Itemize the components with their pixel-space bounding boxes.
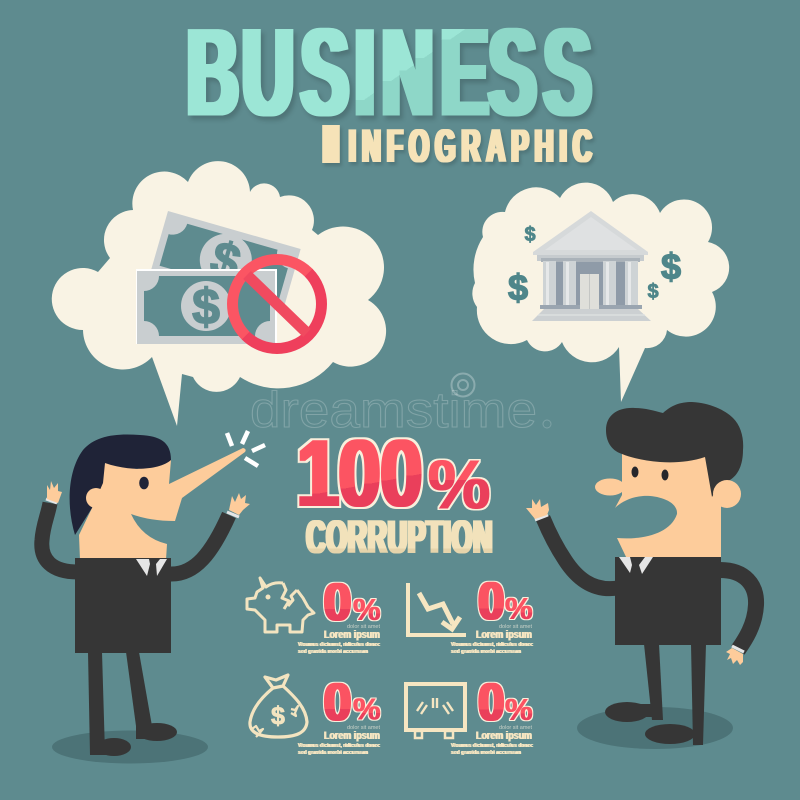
stat item: money bag: $ xyxy=(271,702,285,730)
ear xyxy=(713,480,741,508)
icon: bank building xyxy=(532,211,651,321)
hands xyxy=(47,481,62,503)
stat item: money bag: Lorem ipsum xyxy=(324,730,380,742)
icons: dollar signs around bank: $ xyxy=(508,267,528,308)
stat item: piggy bank xyxy=(247,571,381,655)
icons: dollar signs around bank xyxy=(508,224,681,308)
caption: dolor sit amet xyxy=(347,725,380,731)
stat item: falling chart xyxy=(408,571,533,655)
cuffs xyxy=(535,515,548,520)
watermark: dreamstime xyxy=(250,382,537,438)
shirt collar xyxy=(619,557,632,573)
stat item: safe: Vivamus dictumst, ridiculus donec xyxy=(451,743,533,749)
stat item: money bag xyxy=(250,671,381,756)
caption: dolor sit amet xyxy=(347,624,380,630)
shirt collar xyxy=(136,559,150,576)
stat item: money bag: Vivamus dictumst, ridiculus donec xyxy=(298,743,380,749)
stat item: money bag: sed gravida morbi accumsan xyxy=(298,750,369,756)
nose xyxy=(595,478,625,496)
icon: banknote front: $ xyxy=(192,279,220,335)
icon: banknote front xyxy=(136,269,277,344)
icon: safe xyxy=(406,684,465,738)
eyes xyxy=(632,466,638,478)
stat item: falling chart: % xyxy=(505,591,533,626)
icons: dollar signs around bank: $ xyxy=(524,224,536,246)
icon: broken piggy bank xyxy=(247,578,314,632)
stat item: falling chart: Vivamus dictumst, ridiculus donec xyxy=(451,642,533,648)
icon: banknote behind xyxy=(151,211,301,309)
stat item: safe: Lorem ipsum xyxy=(476,730,532,742)
hands xyxy=(526,499,549,519)
stat item: piggy bank: % xyxy=(353,592,381,627)
ear xyxy=(86,488,106,508)
ground shadow xyxy=(52,730,208,764)
arms xyxy=(543,518,618,589)
arms xyxy=(42,503,78,572)
speech cloud: right xyxy=(472,183,729,402)
headline: 100% xyxy=(297,420,490,527)
headline: 100%: % xyxy=(428,446,490,524)
stat item: money bag: % xyxy=(353,692,381,726)
icons: dollar signs around bank: $ xyxy=(647,281,659,303)
value: 0 xyxy=(324,571,351,632)
stat item: safe: % xyxy=(505,692,533,727)
hair xyxy=(70,434,171,535)
caption: dolor sit amet xyxy=(499,624,532,630)
headline: CORRUPTION: CORRUPTION xyxy=(306,512,493,564)
stat item: falling chart: sed gravida morbi accumsan xyxy=(451,649,522,655)
headline: 100%: 100 xyxy=(297,420,422,527)
subtitle: INFOGRAPHIC: INFOGRAPHIC xyxy=(349,121,598,173)
stat item: piggy bank: sed gravida morbi accumsan xyxy=(298,649,369,655)
icons: dollar signs around bank: $ xyxy=(661,246,681,287)
stat item: falling chart: Lorem ipsum xyxy=(476,629,532,641)
icon: banknote behind: $ xyxy=(204,230,247,292)
title: BUSINESS: BUSINESS xyxy=(187,2,591,143)
ground shadow xyxy=(577,707,733,749)
icon: falling chart xyxy=(408,583,466,635)
face with open mouth xyxy=(615,445,721,559)
character: right man xyxy=(526,402,756,749)
speech cloud: left xyxy=(52,161,386,426)
stat item: piggy bank: Lorem ipsum xyxy=(324,629,380,641)
eye xyxy=(139,477,149,489)
suit body xyxy=(75,558,171,653)
value: 0 xyxy=(479,571,504,631)
suit body xyxy=(615,557,721,645)
cuffs xyxy=(46,499,57,503)
icon: torn money bag xyxy=(250,675,307,737)
stat item: safe xyxy=(406,672,533,756)
stat item: safe: sed gravida morbi accumsan xyxy=(451,750,522,756)
value: 0 xyxy=(479,672,504,732)
caption: dolor sit amet xyxy=(499,725,532,731)
face with long nose xyxy=(79,448,246,560)
hair xyxy=(606,402,743,497)
legs and shoes xyxy=(88,652,177,756)
stat item: piggy bank: Vivamus dictumst, ridiculus donec xyxy=(298,642,380,648)
sparkle marks xyxy=(227,431,265,466)
icon: prohibition sign xyxy=(232,260,322,348)
value: 0 xyxy=(324,671,351,732)
legs and shoes xyxy=(605,644,706,745)
character: left man xyxy=(42,431,265,764)
